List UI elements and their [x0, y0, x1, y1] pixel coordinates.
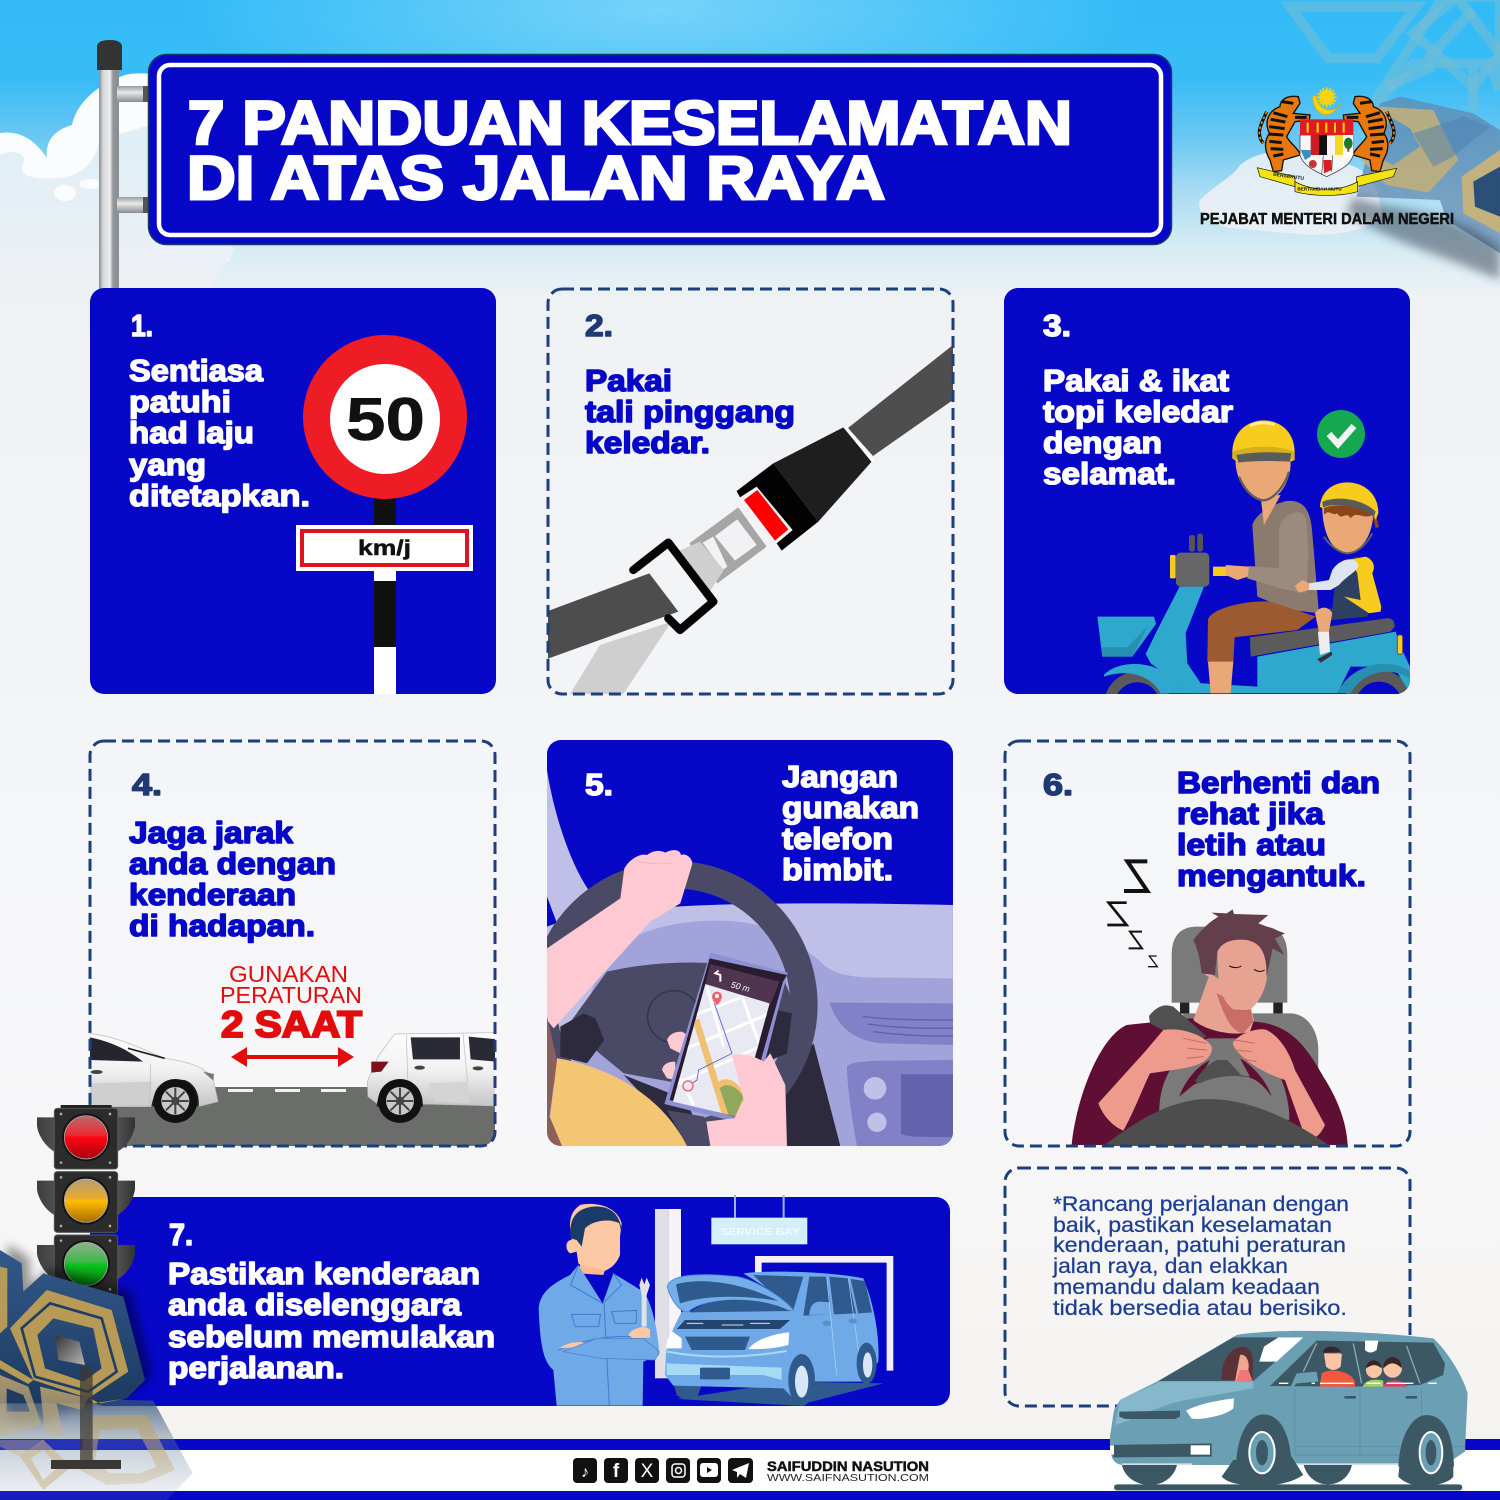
note text: jalan raya, dan elakkan	[1052, 1255, 1288, 1278]
road with cars	[88, 1033, 497, 1147]
note text: *Rancang perjalanan dengan	[1053, 1193, 1349, 1216]
text 5	[782, 760, 919, 887]
text 7	[168, 1257, 495, 1385]
social icons	[573, 1458, 753, 1483]
icon: check	[1317, 410, 1365, 458]
number 2: 2.	[585, 309, 613, 343]
note text	[1052, 1193, 1349, 1320]
driver with phone illustration	[543, 770, 953, 1146]
phone label: 50 m	[730, 980, 751, 994]
text 6: rehat jika	[1177, 797, 1325, 831]
logo: coat of arms: BERSEKUTU	[1273, 172, 1305, 182]
text 5: bimbit.	[782, 853, 893, 887]
text 1: Sentiasa	[129, 354, 264, 388]
social icons: ♪	[581, 1464, 589, 1481]
social icons: f	[613, 1461, 620, 1482]
logo caption: PEJABAT MENTERI DALAM NEGERI	[1200, 211, 1454, 228]
footer name: WWW.SAIFNASUTION.COM	[767, 1473, 929, 1484]
motorcycle riders illustration	[1097, 420, 1410, 694]
footer band	[0, 1439, 1500, 1500]
speed limit sign	[296, 335, 473, 694]
note text: tidak bersedia atau berisiko.	[1053, 1297, 1347, 1320]
title text: 7 PANDUAN KESELAMATAN	[188, 89, 1072, 157]
speed limit sign: 50	[346, 386, 425, 453]
panel 5: phone	[543, 740, 953, 1146]
text 4	[129, 816, 336, 943]
title text: DI ATAS JALAN RAYA	[187, 144, 885, 212]
number 4: 4.	[132, 768, 162, 802]
title board	[148, 54, 1172, 244]
text 5: telefon	[782, 822, 893, 856]
sign label: SERVICE BAY	[720, 1227, 800, 1238]
panel 1: speed limit	[90, 288, 496, 694]
number 7: 7.	[169, 1218, 193, 1252]
panel 3: helmet	[1004, 288, 1410, 694]
mechanic and van illustration	[539, 1195, 893, 1406]
text 2: tali pinggang	[585, 395, 795, 429]
panel: note	[1005, 1168, 1410, 1406]
text 3: topi keledar	[1043, 395, 1233, 429]
text 1	[129, 354, 310, 513]
text 4: Jaga jarak	[129, 816, 293, 850]
footer name	[767, 1458, 929, 1484]
text 1: yang	[129, 448, 206, 482]
text 5: Jangan	[782, 760, 898, 794]
number 6: 6.	[1043, 768, 1073, 802]
social icons: X	[641, 1461, 654, 1482]
family car	[1110, 1331, 1468, 1490]
decorative gold pattern bottom left	[0, 1244, 193, 1500]
text 7: anda diselenggara	[168, 1288, 462, 1322]
two second rule: 2 SAAT	[221, 1004, 362, 1045]
text 7: perjalanan.	[168, 1351, 344, 1385]
speed limit sign: km/j	[358, 537, 411, 560]
note text: baik, pastikan keselamatan	[1053, 1214, 1332, 1237]
text 4: di hadapan.	[129, 909, 315, 943]
number 5: 5.	[585, 768, 613, 802]
decorative lattice top right	[1290, 0, 1500, 280]
title text	[187, 89, 1072, 212]
two second rule: PERATURAN	[220, 982, 362, 1008]
logo: coat of arms	[1257, 87, 1397, 195]
arrow: distance	[231, 1047, 354, 1067]
logo: coat of arms: BERTAMBAH MUTU	[1297, 187, 1342, 192]
background clouds	[0, 73, 1382, 300]
note text: memandu dalam keadaan	[1053, 1276, 1320, 1299]
seat belt illustration	[548, 345, 953, 694]
text 6: Berhenti dan	[1177, 766, 1380, 800]
text 3: Pakai & ikat	[1043, 364, 1229, 398]
panel 6: rest	[1005, 741, 1410, 1146]
note text: kenderaan, patuhi peraturan	[1053, 1234, 1346, 1257]
text 4: anda dengan	[129, 847, 336, 881]
number 1: 1.	[131, 309, 153, 343]
number 3: 3.	[1043, 309, 1071, 343]
two second rule	[220, 961, 362, 1067]
text 2: keledar.	[585, 426, 710, 460]
text 6	[1177, 766, 1380, 893]
text 3: dengan	[1043, 426, 1162, 460]
text 5: gunakan	[782, 791, 919, 825]
text 1: patuhi	[129, 385, 231, 419]
panel 7: maintenance	[90, 1195, 950, 1406]
sign pole	[97, 40, 149, 290]
traffic light	[37, 1105, 135, 1296]
text 4: kenderaan	[129, 878, 296, 912]
text 7: sebelum memulakan	[168, 1320, 495, 1354]
sleepy driver illustration	[1072, 861, 1348, 1146]
text 1: ditetapkan.	[129, 479, 310, 513]
text 7: Pastikan kenderaan	[168, 1257, 480, 1291]
panel 4: safe distance	[88, 741, 497, 1147]
two second rule: GUNAKAN	[229, 961, 348, 987]
text 3	[1043, 364, 1233, 491]
text 6: letih atau	[1177, 828, 1326, 862]
text 2	[585, 364, 795, 460]
text 1: had laju	[129, 416, 254, 450]
text 2: Pakai	[585, 364, 672, 398]
text 6: mengantuk.	[1177, 859, 1366, 893]
panel 2: seat belt	[548, 289, 953, 694]
footer name: SAIFUDDIN NASUTION	[767, 1458, 929, 1474]
text 3: selamat.	[1043, 457, 1176, 491]
